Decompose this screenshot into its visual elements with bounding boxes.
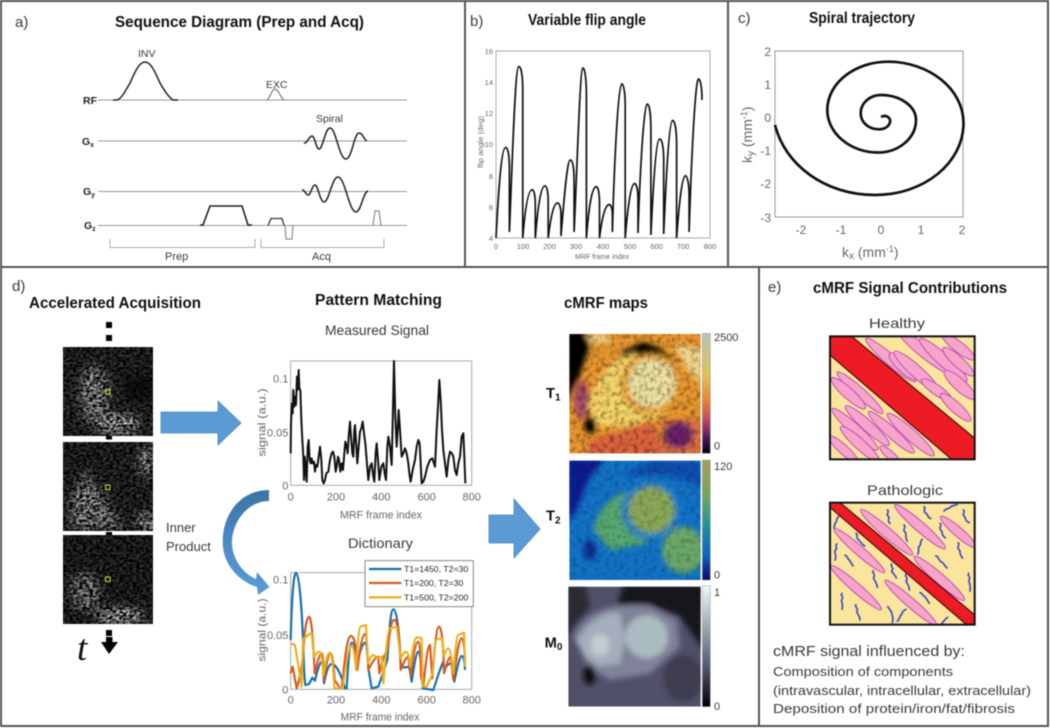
- heading: cMRF maps: cMRF maps: [564, 295, 648, 312]
- plot: spiral: -3: [760, 211, 771, 225]
- plot: spiral: 1: [764, 78, 771, 92]
- line chart: dictionary: 800: [463, 694, 481, 706]
- line chart: measured signal: 400: [372, 492, 390, 504]
- label T1: 1: [555, 393, 561, 404]
- label M0 0: 0: [714, 701, 720, 713]
- line chart: dictionary: 0.1: [273, 574, 288, 586]
- heading: variable flip angle: Variable flip angle: [528, 12, 646, 29]
- line chart: flip angle: 400: [597, 242, 609, 251]
- series T1=500 T2=200: [291, 625, 465, 688]
- line chart: dictionary: [256, 561, 481, 724]
- map: M0: [567, 585, 703, 707]
- waveform: Gz spoiler: [373, 211, 381, 226]
- plot: spiral: -1: [836, 223, 847, 237]
- line chart: measured signal: 200: [327, 492, 345, 504]
- arrow: dictionary to maps: [489, 499, 540, 558]
- label Spiral: Spiral: [316, 113, 343, 125]
- panel label b: b): [470, 13, 483, 30]
- legend: T1=500, T2=200: [404, 592, 469, 602]
- panel label a: a): [15, 14, 28, 31]
- waveform: Gz slice select: [268, 218, 284, 226]
- plot: spiral: y: [746, 151, 757, 156]
- plot: spiral: 1: [918, 223, 925, 237]
- line chart: flip angle: 200: [543, 242, 556, 251]
- line chart: dictionary: signal (a.u.): [256, 598, 268, 662]
- plot: spiral: (mm: [854, 244, 886, 260]
- label M0: 0: [557, 642, 563, 653]
- plot: spiral: -2: [796, 223, 807, 237]
- heading: signal contributions: cMRF Signal Contributions: [813, 280, 1007, 297]
- line chart: flip angle: 6: [489, 203, 493, 212]
- label M0: M: [545, 635, 557, 651]
- line chart: measured signal: signal (a.u.): [256, 388, 268, 457]
- frame 1: [63, 347, 153, 436]
- heading: pattern matching: Pattern Matching: [315, 292, 442, 309]
- label: inner product: Product: [166, 539, 211, 554]
- arrow: time: [101, 637, 118, 654]
- waveform: Gy spiral: [302, 177, 368, 212]
- channel labels: G: [83, 186, 91, 198]
- channel labels: z: [92, 226, 96, 233]
- plot: spiral: 2: [764, 45, 771, 59]
- line chart: measured signal: [256, 361, 481, 522]
- plot: spiral: k: [739, 156, 755, 163]
- legend: [365, 561, 473, 607]
- plot: spiral: k: [842, 244, 849, 260]
- plot: spiral: -1: [886, 244, 894, 254]
- channel labels: G: [84, 220, 92, 232]
- line chart: flip angle: 600: [650, 242, 663, 251]
- waveform: Gz prep trapezoid: [200, 206, 252, 225]
- panel: e) signal contributions: [759, 267, 1048, 726]
- heading: spiral trajectory: Spiral trajectory: [809, 10, 915, 27]
- diagram: pathologic tissue: [828, 501, 979, 628]
- heading: accelerated acquisition: Accelerated Acquisition: [29, 295, 201, 312]
- line chart: flip angle: 4: [489, 234, 493, 243]
- line chart: flip angle: 8: [489, 172, 493, 181]
- line chart: flip angle: 700: [677, 242, 689, 251]
- heading: sequence diagram: Sequence Diagram (Prep and Acq): [115, 14, 364, 31]
- label Prep: Prep: [165, 251, 188, 263]
- line chart: flip angle: MRF frame index: [575, 252, 629, 261]
- plot: spiral: (mm: [739, 119, 755, 151]
- bracket: Acq: [261, 239, 384, 248]
- line chart: flip angle: 100: [517, 242, 529, 251]
- plot: spiral: -1: [760, 144, 771, 158]
- channel labels: G: [82, 136, 90, 148]
- panel label e: e): [768, 279, 781, 296]
- line chart: flip angle: flip angle (deg): [478, 116, 485, 168]
- label: measured signal: Measured Signal: [325, 322, 429, 338]
- plot: spiral: 0: [878, 223, 885, 237]
- label EXC: EXC: [266, 79, 288, 91]
- line chart: dictionary: MRF frame index: [341, 712, 420, 724]
- label 120: 120: [714, 461, 732, 473]
- axis lines: [98, 100, 407, 226]
- label 1: 1: [714, 587, 720, 599]
- plot: spiral: ): [894, 244, 899, 260]
- line chart: flip angle: 300: [570, 242, 582, 251]
- plot: spiral: [739, 45, 966, 262]
- waveform: Gx spiral: [304, 128, 367, 159]
- label: dictionary: Dictionary: [348, 535, 413, 551]
- panel label c: c): [738, 10, 750, 27]
- text block: signal influences: Composition of components: [773, 664, 954, 679]
- pulse: excitation: [267, 89, 284, 100]
- colorbar T1: [702, 333, 710, 453]
- line chart: measured signal: 800: [463, 492, 481, 504]
- colorbar M0: [702, 586, 710, 707]
- line chart: measured signal: MRF frame index: [340, 510, 422, 522]
- line chart: measured signal: 600: [418, 492, 436, 504]
- line chart: dictionary: 0: [288, 694, 294, 706]
- panel: c) spiral trajectory: [728, 1, 1048, 267]
- label: inner product: Inner: [166, 520, 196, 535]
- panel: d) acquisition, matching and maps: [1, 267, 759, 726]
- map: T1: [567, 331, 703, 457]
- map: T2: [567, 458, 705, 580]
- line chart: flip angle: 12: [485, 109, 493, 118]
- line chart: dictionary: 600: [418, 694, 436, 706]
- plot: spiral: -1: [739, 111, 749, 119]
- panel label d: d): [12, 278, 25, 295]
- label 2500: 2500: [714, 332, 738, 344]
- arrow: frames to signal: [161, 401, 241, 445]
- waveform: Gz rewinder: [285, 225, 293, 239]
- text block: signal influences: [773, 643, 1031, 716]
- frame 3: [63, 535, 153, 624]
- series T1=200 T2=30: [291, 617, 465, 688]
- label: pathologic: Pathologic: [867, 482, 943, 498]
- plot: spiral: 2: [959, 223, 966, 237]
- panel: a) sequence diagram: [1, 1, 465, 267]
- series T1=1450 T2=30: [291, 573, 465, 690]
- plot: spiral: 0: [764, 111, 771, 125]
- legend: T1=1450, T2=30: [404, 564, 469, 574]
- line chart: flip angle: 14: [485, 78, 493, 87]
- pulse: inversion: [113, 62, 178, 100]
- line chart: flip angle: [478, 47, 716, 261]
- line chart: dictionary: 0: [282, 684, 288, 696]
- text block: signal influences: cMRF signal influenced by:: [773, 643, 965, 660]
- dots above stack: [106, 322, 112, 636]
- maps: [545, 331, 738, 713]
- line chart: flip angle: 800: [704, 242, 716, 251]
- label T2: 2: [555, 515, 561, 526]
- label: t: t: [77, 628, 89, 669]
- channel labels: y: [91, 192, 95, 199]
- channel labels: x: [90, 142, 94, 149]
- line chart: flip angle: 500: [624, 242, 636, 251]
- channel labels: RF: [83, 95, 98, 107]
- line chart: measured signal: 0.05: [267, 428, 288, 440]
- plot: spiral: -2: [760, 177, 771, 191]
- frame 2: [63, 442, 155, 531]
- channel labels: [82, 95, 98, 233]
- diagram: healthy tissue: [828, 334, 976, 462]
- line chart: dictionary: 200: [327, 694, 345, 706]
- label INV: INV: [138, 48, 156, 60]
- label T2: T: [546, 509, 555, 525]
- label T2 0: 0: [714, 570, 720, 582]
- line chart: flip angle: 0: [494, 242, 498, 251]
- line chart: dictionary: 400: [372, 694, 390, 706]
- text block: signal influences: Deposition of protein/iron/fat/fibrosis: [773, 701, 1016, 716]
- line chart: measured signal: 0.1: [273, 374, 288, 386]
- line chart: measured signal: 0: [282, 480, 288, 492]
- arrow: curved inner product: [223, 490, 270, 595]
- panel: b) variable flip angle: [465, 1, 728, 267]
- label: healthy: Healthy: [869, 315, 925, 331]
- plot: spiral: ): [739, 106, 755, 111]
- colorbar T2: [702, 460, 710, 580]
- label Acq: Acq: [312, 251, 331, 263]
- line chart: flip angle: 16: [485, 47, 493, 56]
- label T1 0: 0: [714, 440, 720, 452]
- image stack: undersampled frames: [63, 322, 155, 636]
- legend: T1=200, T2=30: [404, 578, 464, 588]
- line chart: dictionary: 0.05: [267, 630, 288, 642]
- plot: spiral: x: [849, 251, 854, 262]
- line chart: measured signal: 0: [288, 492, 294, 504]
- text block: signal influences: (intravascular, intracellular, extracellular): [773, 683, 1031, 698]
- bracket: Prep: [110, 239, 255, 248]
- label T1: T: [546, 386, 555, 402]
- line chart: flip angle: 10: [485, 140, 493, 149]
